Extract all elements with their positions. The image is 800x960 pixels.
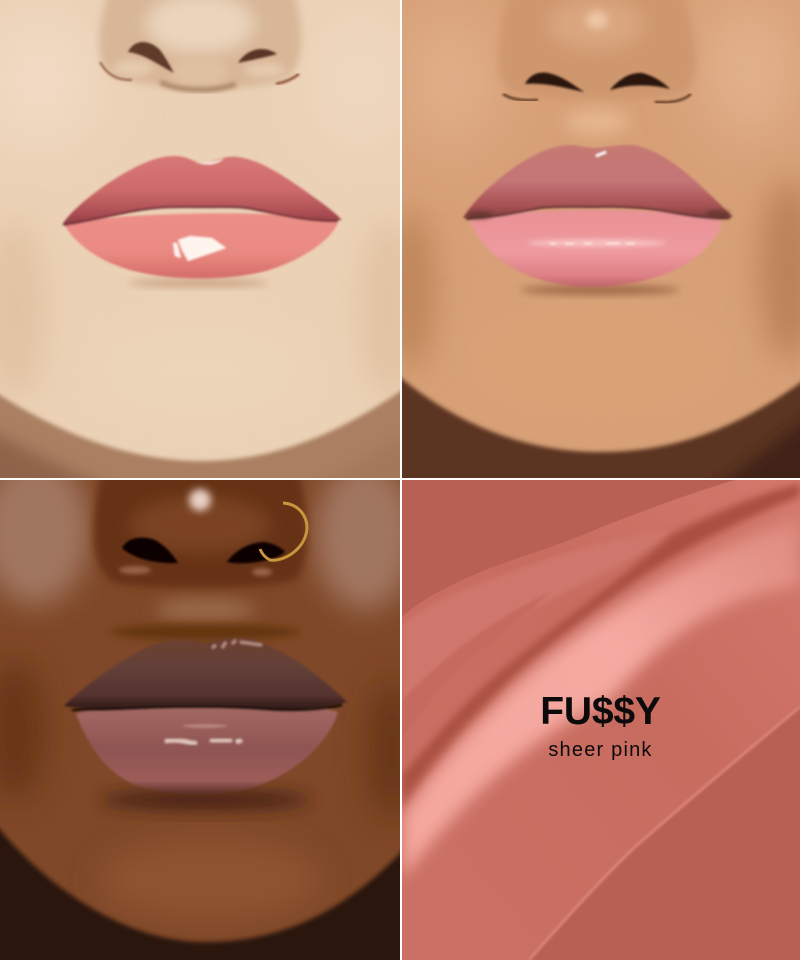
icon: gold nose ring — [260, 503, 307, 560]
panel: deep skin lips photo — [0, 480, 400, 960]
panel: lip gloss swatch — [402, 480, 800, 960]
upper smear ridge — [404, 540, 642, 694]
nose — [498, 0, 696, 134]
swatch smear — [402, 480, 800, 960]
nose — [93, 460, 307, 588]
highlight band — [402, 518, 800, 880]
panel: fair skin lips photo — [0, 0, 400, 478]
neck shadow — [0, 826, 400, 960]
neck shadow — [402, 374, 800, 478]
swatch label — [540, 690, 661, 761]
gloss highlights — [178, 236, 226, 261]
lower lip — [65, 213, 338, 279]
swatch label: FU$$Y — [540, 690, 661, 733]
lips — [62, 156, 342, 279]
lips — [463, 145, 733, 287]
dark crease — [402, 484, 800, 810]
lip under-shadow — [520, 285, 680, 295]
upper lip — [62, 156, 342, 225]
neck shadow — [0, 388, 400, 478]
lower edge line — [529, 707, 800, 960]
panel: medium skin lips photo — [402, 0, 800, 478]
nose — [99, 0, 301, 90]
lips — [64, 638, 347, 794]
lip under-shadow — [128, 279, 268, 287]
swatch label: sheer pink — [548, 739, 653, 761]
lip shadows — [110, 624, 300, 640]
